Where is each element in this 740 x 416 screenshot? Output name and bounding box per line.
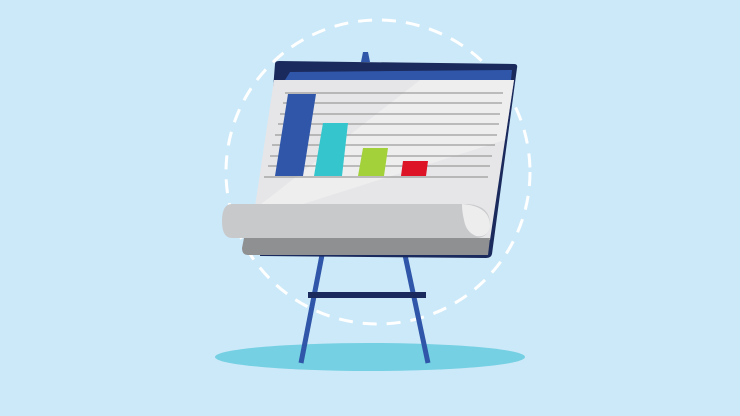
- easel legs: [301, 255, 428, 363]
- floor shadow: [215, 343, 525, 371]
- paper: [250, 80, 514, 240]
- grid lines: [264, 93, 503, 177]
- paper bottom stack: [242, 238, 490, 255]
- easel top nub: [361, 52, 370, 62]
- board back: [260, 61, 517, 258]
- bar chart: [275, 94, 428, 176]
- board top blue strip: [285, 70, 512, 80]
- curl highlight: [462, 204, 490, 236]
- dashed circle: [226, 20, 530, 324]
- paper curl: [222, 204, 490, 238]
